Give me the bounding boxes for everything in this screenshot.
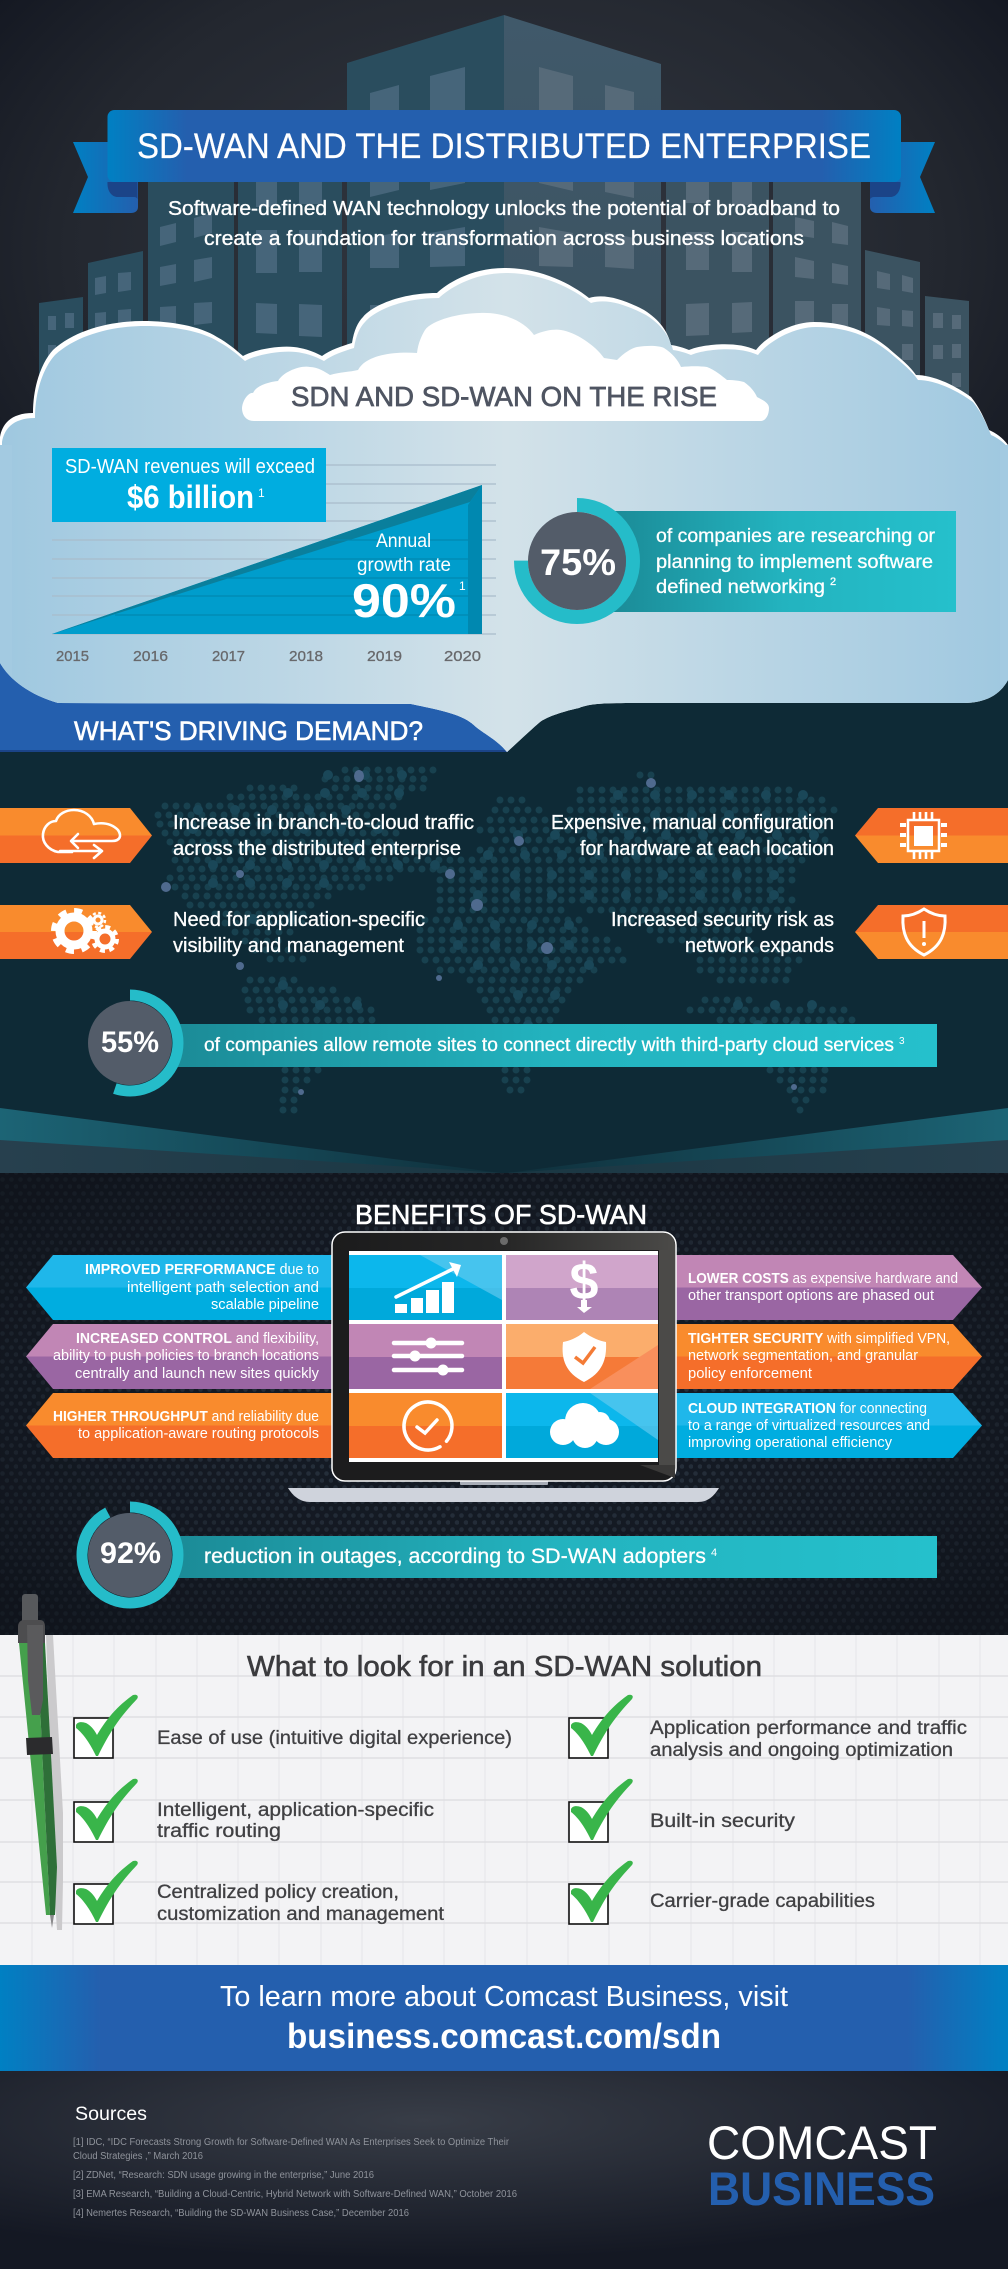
skyline buildings: [39, 15, 969, 440]
check item: built-in security: [569, 1779, 796, 1842]
heading: SDN and SD-WAN on the rise: SDN AND SD-WAN ON THE RISE: [291, 381, 717, 412]
section divider wedges: [0, 1108, 1008, 1173]
benefit: higher throughput: HIGHER THROUGHPUT and reliability due: [53, 1408, 319, 1425]
heading: what's driving demand: WHAT'S DRIVING DEMAND?: [74, 716, 423, 746]
check item: traffic routing: traffic routing: [157, 1821, 281, 1842]
check item: ease of use: Ease of use (intuitive digital experience): [157, 1728, 512, 1749]
check item: carrier-grade: Carrier-grade capabilities: [650, 1891, 875, 1912]
heading: benefits of SD-WAN: BENEFITS OF SD-WAN: [355, 1199, 647, 1230]
chart year labels: 2016: [133, 648, 168, 665]
benefit: improved performance: [26, 1255, 332, 1320]
benefit: cloud integration: improving operational efficiency: [688, 1434, 892, 1451]
driver: security risk: network expands: [685, 935, 834, 957]
Comcast Business logo: BUSINESS: [708, 2162, 935, 2215]
chart year labels: 2015: [56, 648, 89, 665]
check item: built-in security: Built-in security: [650, 1811, 796, 1832]
cloud panel: [0, 268, 1008, 757]
benefit: cloud integration: [676, 1393, 982, 1458]
sources: Cloud Strategies ,” March 2016: [73, 2151, 203, 2162]
benefit: lower costs: [676, 1255, 982, 1320]
benefit: improved performance: scalable pipeline: [211, 1296, 319, 1313]
benefit: cloud integration: CLOUD INTEGRATION for connecting: [688, 1400, 927, 1417]
callout: revenue: SD-WAN revenues will exceed: [65, 456, 315, 478]
stat: 92%: 92%: [100, 1537, 161, 1570]
benefit: increased control: [26, 1324, 332, 1389]
screen tile: dollar: $: [570, 1253, 598, 1311]
screen tile: sliders: [349, 1324, 502, 1389]
check item: application performance: analysis and ongoing optimization: [650, 1740, 953, 1761]
driver: security risk: Increased security risk as: [611, 909, 834, 931]
driver: application visibility: [0, 905, 425, 959]
benefit: increased control: ability to push policies to branch locations: [53, 1347, 319, 1364]
annual growth rate label: Annual: [376, 531, 431, 552]
check item: ease of use: [74, 1695, 512, 1758]
callout: revenue: 1: [258, 486, 265, 500]
checklist panel background: [0, 1635, 1008, 1965]
driver: application visibility: Need for application-specific: [173, 909, 425, 931]
highlighted map points: [161, 770, 797, 1095]
call to action band: [0, 1965, 1008, 2071]
check item: application performance: [569, 1695, 967, 1761]
annual growth rate label: [352, 531, 466, 627]
driver: security risk: [611, 905, 1008, 959]
benefit: increased control: centrally and launch new sites quickly: [75, 1365, 319, 1382]
stat: 75%: planning to implement software: [656, 552, 933, 573]
driver: branch-to-cloud traffic: across the distributed enterprise: [173, 838, 461, 860]
pen illustration: [18, 1594, 63, 1930]
callout: revenue: [52, 448, 326, 522]
chart year labels: [56, 648, 481, 665]
check item: centralized policy: customization and management: [157, 1904, 445, 1925]
sources: [1] IDC, “IDC Forecasts Strong Growth for Software-Defined WAN As Enterprises Seek to Optimize Their: [73, 2137, 510, 2148]
stat: 92%: 4: [711, 1547, 717, 1559]
subtitle: create a foundation for transformation across business locations: [204, 228, 804, 250]
Comcast Business logo: COMCAST: [707, 2116, 937, 2169]
callout: revenue: $6 billion: [127, 479, 254, 515]
title ribbon: [73, 110, 935, 213]
benefit: higher throughput: to application-aware routing protocols: [78, 1425, 319, 1442]
check item: traffic routing: [74, 1779, 434, 1842]
driver: manual configuration: Expensive, manual configuration: [551, 812, 834, 834]
growth area chart: [52, 465, 496, 665]
benefit: tighter security: policy enforcement: [688, 1365, 813, 1382]
check item: centralized policy: Centralized policy creation,: [157, 1882, 399, 1903]
section background: what's driving demand: [0, 650, 1008, 1173]
sources: [3] EMA Research, “Building a Cloud-Centric, Hybrid Network with Software-Defined WAN,” October 2016: [73, 2189, 517, 2200]
benefit: higher throughput: [26, 1393, 332, 1458]
stat: 92%: [82, 1507, 937, 1603]
benefit: increased control: INCREASED CONTROL and flexibility,: [76, 1330, 319, 1347]
annual growth rate label: 1: [459, 579, 466, 593]
driver: branch-to-cloud traffic: Increase in branch-to-cloud traffic: [173, 812, 474, 834]
section background: benefits: [0, 1173, 1008, 1635]
stat: 55%: 3: [899, 1036, 905, 1047]
benefit: lower costs: other transport options are phased out: [688, 1287, 935, 1304]
annual growth rate label: 90%: [352, 574, 456, 627]
stat: 75%: 2: [830, 576, 836, 588]
stat: 92%: reduction in outages, according to SD-WAN adopters: [204, 1545, 706, 1568]
stat: 75%: of companies are researching or: [656, 526, 936, 547]
stat: 75%: [521, 505, 956, 617]
sources: [4] Nemertes Research, “Building the SD-WAN Business Case,” December 2016: [73, 2208, 409, 2219]
screen tile: shield: [506, 1324, 658, 1389]
chart year labels: 2017: [212, 648, 245, 665]
benefit: improved performance: intelligent path selection and: [127, 1279, 319, 1296]
what's driving demand banner: [0, 650, 508, 752]
driver: application visibility: visibility and management: [173, 935, 404, 957]
screen tile: dollar: [506, 1253, 658, 1320]
benefit: tighter security: [676, 1324, 982, 1389]
screen tile: check circle: [349, 1393, 502, 1459]
call to action band: To learn more about Comcast Business, visit: [220, 1981, 788, 2013]
check item: application performance: Application performance and traffic: [650, 1718, 967, 1739]
stat: 55%: 55%: [101, 1026, 159, 1059]
footer background: [0, 2071, 1008, 2269]
background: header: [0, 0, 1008, 700]
sources: [73, 2104, 517, 2219]
driver: manual configuration: [551, 808, 1008, 863]
sources: [2] ZDNet, “Research: SDN usage growing in the enterprise,” June 2016: [73, 2170, 374, 2181]
screen tile: cloud: [506, 1393, 658, 1458]
stat: 75%: defined networking: [656, 577, 825, 598]
stat: 55%: [82, 995, 937, 1091]
benefit: lower costs: LOWER COSTS as expensive hardware and: [688, 1270, 958, 1287]
stat: 55%: of companies allow remote sites to connect directly with third-party cloud services: [204, 1035, 894, 1056]
subtitle: [168, 198, 840, 250]
check item: carrier-grade: [569, 1861, 875, 1924]
world map dots: [158, 770, 870, 1110]
heading: what to look for: What to look for in an SD-WAN solution: [247, 1651, 762, 1683]
stat: 75%: 75%: [540, 542, 616, 583]
laptop illustration: [288, 1232, 719, 1502]
Comcast Business logo: [707, 2116, 937, 2215]
heading: title: SD-WAN AND THE DISTRIBUTED ENTERPRISE: [137, 127, 871, 166]
check item: centralized policy: [74, 1861, 445, 1925]
chart year labels: 2018: [289, 648, 323, 665]
benefit: cloud integration: to a range of virtualized resources and: [688, 1417, 930, 1434]
call to action band: business.comcast.com/sdn: [287, 2017, 721, 2056]
check item: traffic routing: Intelligent, application-specific: [157, 1800, 434, 1821]
chart year labels: 2019: [367, 648, 402, 665]
screen tile: growth chart: [349, 1255, 502, 1320]
benefit: tighter security: network segmentation, and granular: [688, 1347, 918, 1364]
benefit: improved performance: IMPROVED PERFORMANCE due to: [85, 1261, 319, 1278]
annual growth rate label: growth rate: [357, 555, 451, 576]
chart year labels: 2020: [444, 648, 481, 665]
sources: Sources: [75, 2104, 147, 2125]
driver: branch-to-cloud traffic: [0, 808, 474, 863]
driver: manual configuration: for hardware at each location: [580, 838, 834, 860]
subtitle: Software-defined WAN technology unlocks the potential of broadband to: [168, 198, 840, 220]
benefit: tighter security: TIGHTER SECURITY with simplified VPN,: [688, 1330, 950, 1347]
